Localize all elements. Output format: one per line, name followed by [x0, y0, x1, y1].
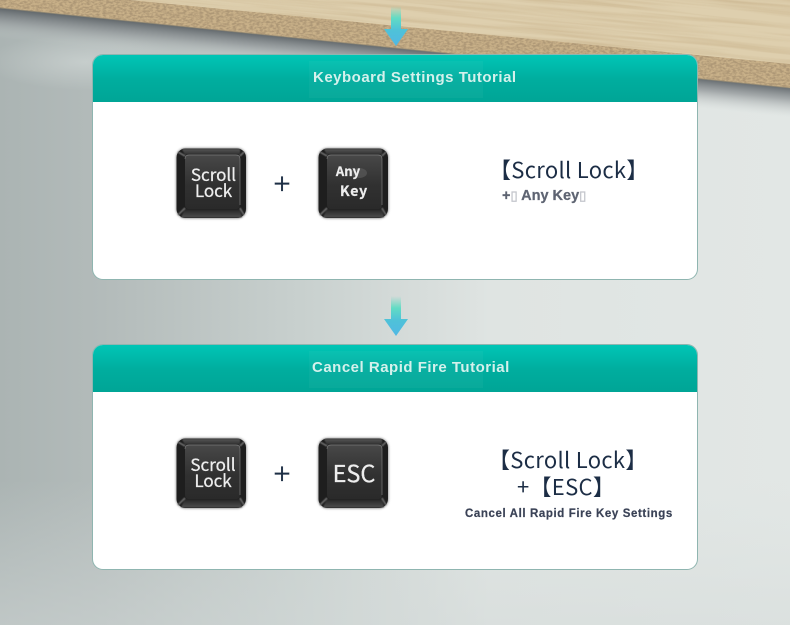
key: any key: Key: [340, 181, 368, 201]
label: plus esc: +【ESC】: [517, 470, 615, 502]
panel: keyboard settings tutorial: [93, 55, 697, 279]
key: scroll lock: Scroll: [190, 451, 236, 476]
key: scroll lock: [174, 146, 248, 220]
label: any key: +▯ Any Key▯: [502, 188, 586, 204]
panel: cancel rapid fire tutorial: [93, 345, 697, 569]
heading: cancel rapid fire: Cancel Rapid Fire Tutorial: [312, 359, 510, 376]
key: scroll lock: Scroll: [191, 161, 236, 186]
wood shelf: [0, 0, 790, 88]
heading: keyboard settings: [93, 55, 697, 102]
arrow: middle: [384, 297, 408, 336]
plus sign: +: [272, 461, 292, 487]
heading: keyboard settings: Keyboard Settings Tutorial: [313, 69, 517, 86]
key: any key: [316, 146, 390, 220]
plus sign: +: [272, 171, 292, 197]
heading: cancel rapid fire: [93, 345, 697, 392]
key: scroll lock: Lock: [194, 467, 232, 492]
key: esc: ESC: [333, 455, 375, 489]
key: scroll lock: [174, 436, 248, 510]
label: scroll lock: 【Scroll Lock】: [488, 443, 648, 475]
label: scroll lock: 【Scroll Lock】: [489, 153, 649, 185]
key: any key: Any: [335, 161, 361, 180]
key: scroll lock: Lock: [195, 177, 233, 202]
label: cancel all settings: Cancel All Rapid Fire Key Settings: [465, 508, 673, 520]
key: esc: [316, 436, 390, 510]
arrow: top: [384, 7, 408, 46]
